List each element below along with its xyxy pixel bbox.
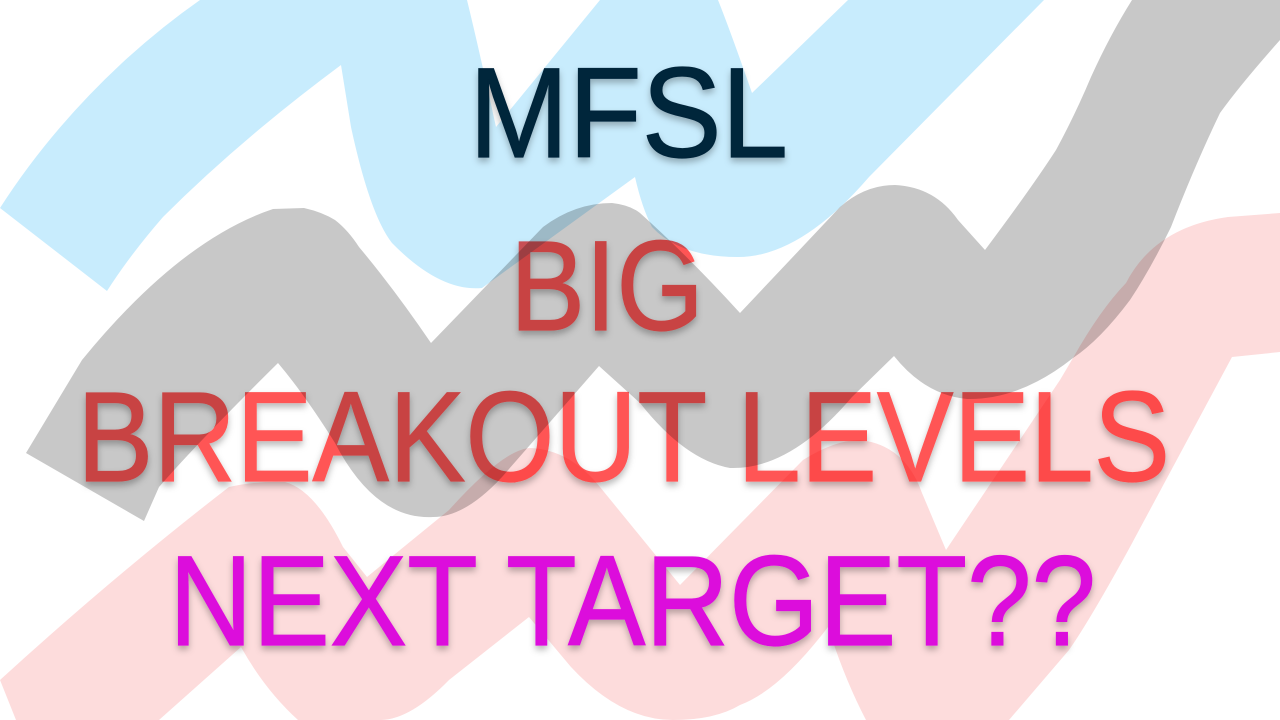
heading: BIG: BIG [510,215,704,358]
background ribbon: grey zigzag [26,0,1280,521]
heading: NEXT TARGET??: NEXT TARGET?? [169,530,1096,673]
background ribbon: pink zigzag [0,213,1280,720]
title: MFSL: MFSL [469,42,788,185]
background ribbon: blue zigzag [0,0,1044,291]
heading: BREAKOUT LEVELS: BREAKOUT LEVELS [77,366,1170,509]
